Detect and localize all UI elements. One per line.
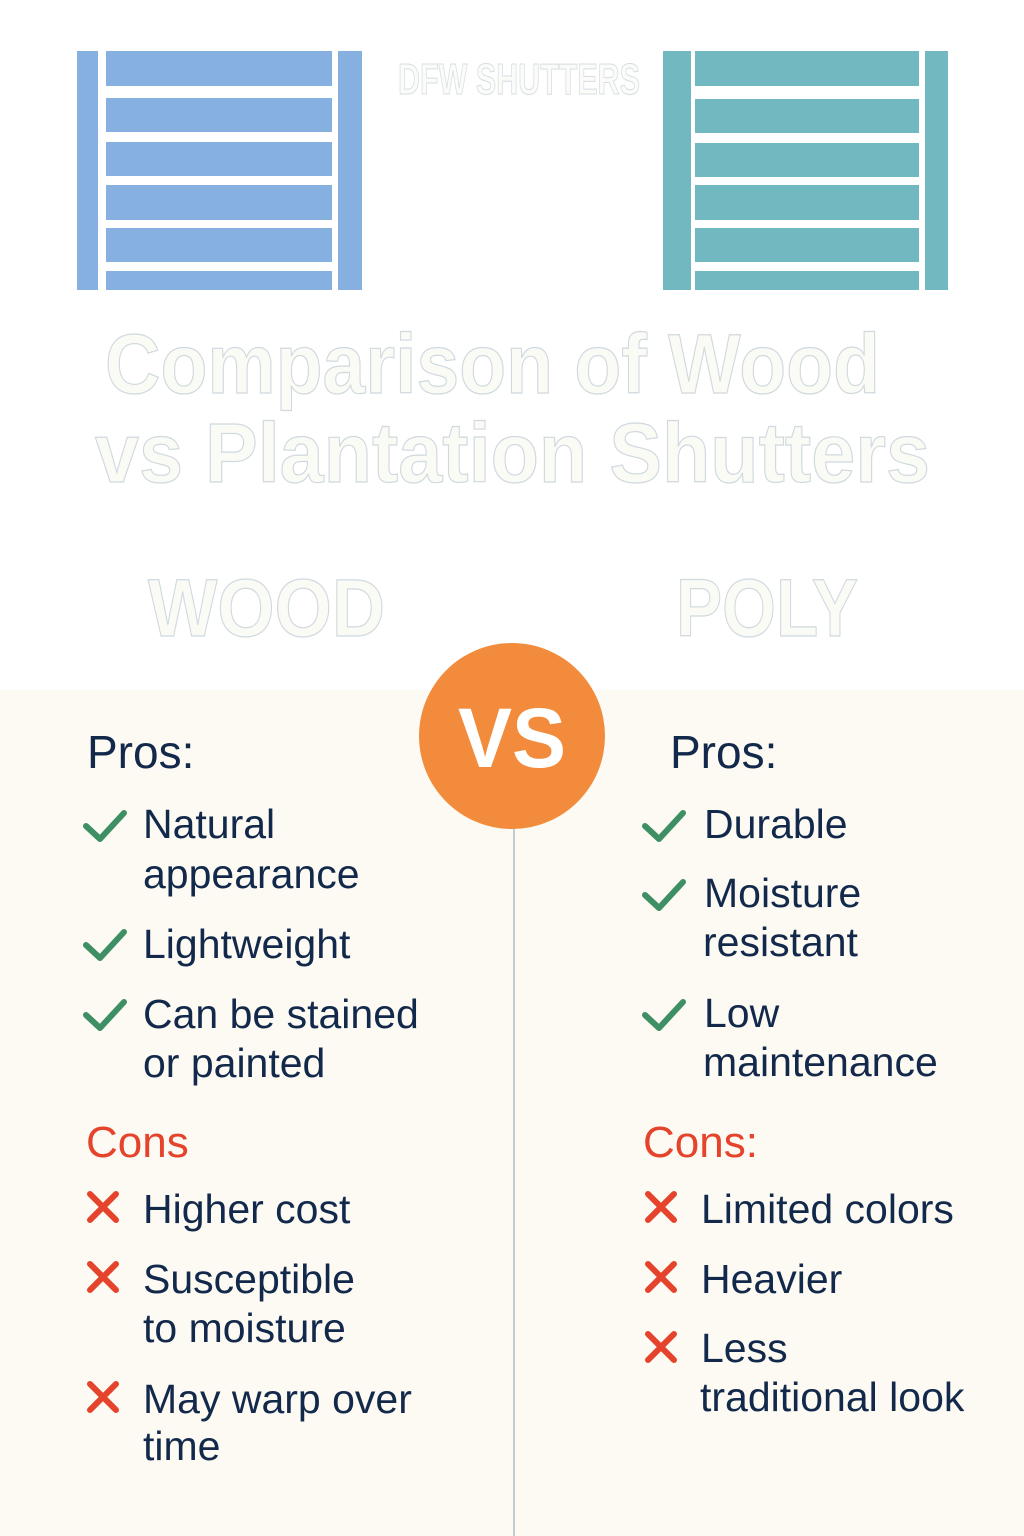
divider line <box>513 820 515 1536</box>
list: wood pros: Can be stained <box>143 991 419 1037</box>
list: wood pros: Lightweight <box>143 921 351 967</box>
list: wood pros <box>86 801 419 1086</box>
heading: wood pros: Pros: <box>87 726 194 778</box>
heading: POLY: POLY <box>676 563 858 654</box>
list: wood pros: or painted <box>143 1040 325 1086</box>
brand: DFW SHUTTERS: DFW SHUTTERS <box>398 55 640 104</box>
list: wood cons: Susceptible <box>143 1256 355 1302</box>
list: wood pros: appearance <box>143 851 360 897</box>
list: wood cons: to moisture <box>143 1305 346 1351</box>
title: vs Plantation Shutters <box>95 406 930 500</box>
list: wood cons: time <box>143 1423 220 1469</box>
list: poly cons: Heavier <box>701 1256 842 1302</box>
heading: poly cons: Cons: <box>643 1118 758 1167</box>
list: poly pros: Low <box>704 990 780 1036</box>
title: Comparison of Wood <box>105 317 880 411</box>
list: wood cons: May warp over <box>143 1376 412 1422</box>
heading: WOOD: WOOD <box>148 563 385 654</box>
list: poly pros: resistant <box>703 919 859 965</box>
heading: poly pros: Pros: <box>670 726 777 778</box>
list: poly pros: maintenance <box>703 1039 938 1085</box>
VS badge: VS <box>458 691 566 785</box>
list: poly cons <box>648 1186 965 1420</box>
list: poly cons: Less <box>701 1325 788 1371</box>
heading: wood cons: Cons <box>86 1118 189 1167</box>
list: poly cons: traditional look <box>700 1374 965 1420</box>
list: poly pros <box>645 801 938 1085</box>
icon: poly shutter <box>663 51 948 290</box>
list: poly pros: Durable <box>704 801 848 847</box>
icon: wood shutter <box>77 51 362 290</box>
list: wood cons <box>90 1186 412 1469</box>
title <box>95 317 930 500</box>
list: poly cons: Limited colors <box>701 1186 954 1232</box>
panel: wood pros/cons <box>86 726 419 1469</box>
list: wood pros: Natural <box>143 801 275 847</box>
VS badge <box>419 643 605 829</box>
list: poly pros: Moisture <box>704 870 861 916</box>
list: wood cons: Higher cost <box>143 1186 351 1232</box>
panel: poly pros/cons <box>643 726 965 1420</box>
